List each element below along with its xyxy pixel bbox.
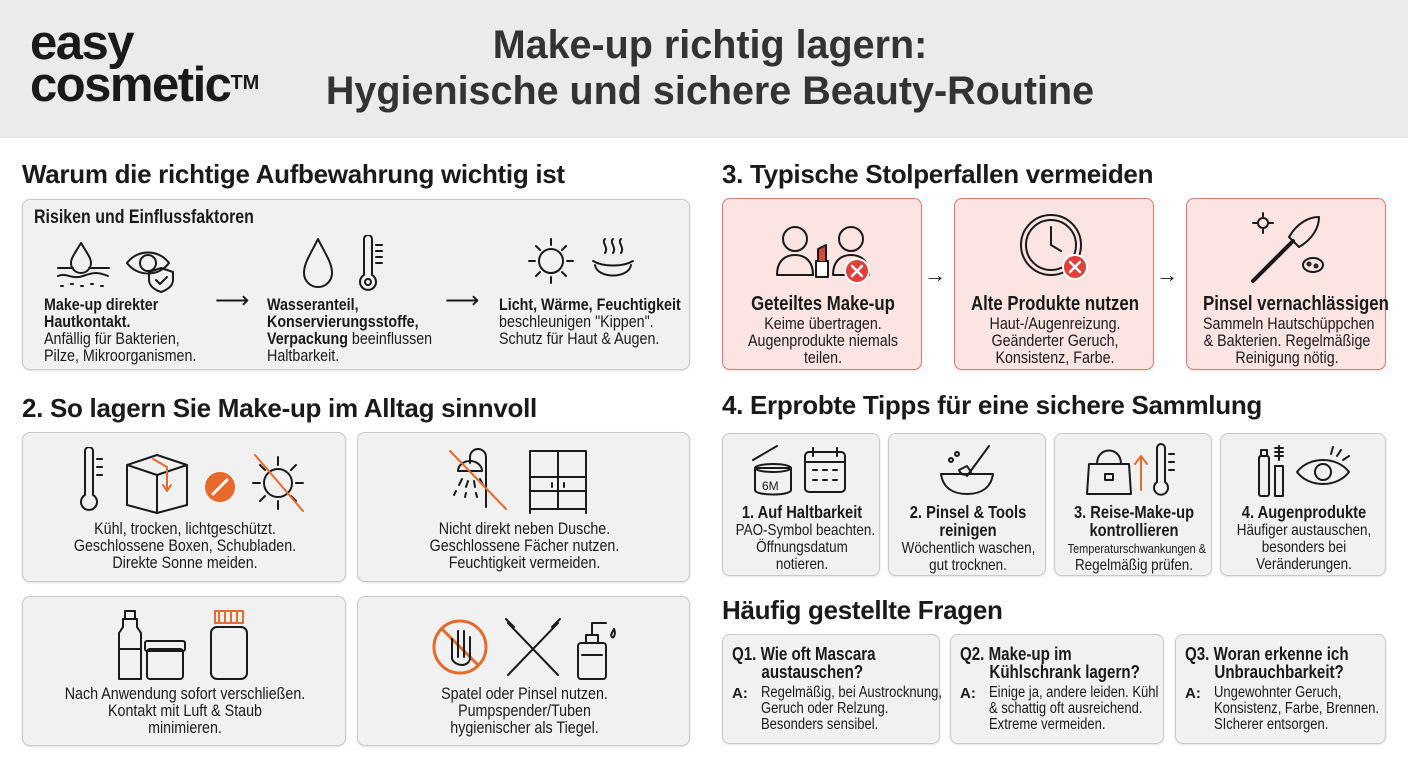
faq 2: Einige ja, andere leiden. Kühl [989,684,1158,701]
text 2: Wasseranteil, [267,295,359,314]
text: 1. Auf Haltbarkeit [742,502,862,522]
faq 3: Unbrauchbarkeit? [1214,662,1344,682]
heading: section 3: 3. Typische Stolperfallen vermeiden [722,159,1153,189]
text 2: Konservierungsstoffe, [267,312,419,331]
text: Geänderter Geruch, [991,331,1118,350]
text 2 [267,295,432,365]
faq 3: A: [1185,685,1201,702]
title [326,23,1094,113]
text: Spatel oder Pinsel nutzen. [441,684,608,703]
text [430,519,619,572]
text: & Bakterien. Regelmäßige [1204,331,1370,350]
faq 2: A: [960,685,976,702]
text: Geteiltes Make-up [751,293,895,315]
text 1: Anfällig für Bakterien, [44,329,180,348]
text: 3. Reise-Make-up [1074,502,1194,522]
icons: shower cabinet [449,448,587,514]
text [748,293,898,367]
icons: drop + thermometer [303,235,383,291]
faq 1: austauschen? [761,662,863,682]
text 1 [44,295,196,365]
tip 1 [722,433,880,576]
text: Regelmäßig prüfen. [1075,557,1193,574]
text: 2. Pinsel & Tools [910,502,1026,522]
logo: cosmeticTM [30,58,259,112]
text 1: Hautkontakt. [44,312,130,331]
text: Veränderungen. [1256,556,1352,573]
faq 3: SIcherer entsorgen. [1214,716,1328,733]
text: Kühl, trocken, lichtgeschützt. [94,519,276,538]
text [441,684,608,737]
text: kontrollieren [1089,520,1179,540]
text 2: Haltbarkeit. [267,346,339,365]
title: Make-up richtig lagern: [493,23,927,67]
text: Haut-/Augenreizung. [990,314,1120,333]
text 3: Schutz für Haut & Augen. [499,329,659,348]
text: PAO-Symbol beachten. [736,522,875,539]
text: reinigen [939,520,997,540]
title: Hygienische und sichere Beauty-Routine [326,69,1094,113]
faq 2: Kühlschrank lagern? [989,662,1140,682]
text 3 [499,295,681,348]
card: cool dry [22,432,346,582]
icons: thermo box sun [80,447,304,514]
text: Keime übertragen. [764,314,882,333]
text [65,684,305,737]
text: notieren. [776,556,828,573]
tip 4 [1220,433,1386,576]
heading: section 2: 2. So lagern Sie Make-up im Alltag sinnvoll [22,393,537,423]
text: Temperaturschwankungen & [1068,541,1206,556]
heading: section 4: 4. Erprobte Tipps für eine sichere Sammlung [722,390,1262,420]
arrow: ⟶ [445,287,479,314]
faq 3: Ungewohnter Geruch, [1214,684,1341,701]
logo: easy [30,16,133,70]
text: besonders bei [1262,539,1346,556]
heading: section 1: Warum die richtige Aufbewahrung wichtig ist [22,159,565,189]
icon: mascara eye [1258,445,1350,497]
icons: no hand, brushes, pump [432,618,616,680]
text: Reinigung nötig. [1235,348,1339,367]
tip 3 [1054,433,1212,576]
icon: clock [1020,214,1088,280]
text: 4. Augenprodukte [1242,502,1366,522]
icon: brush bacteria [1250,212,1324,284]
text: Kontakt mit Luft & Staub [108,701,262,720]
text: gut trocknen. [929,557,1007,574]
text: Öffnungsdatum [756,539,848,556]
text: hygienischer als Tiegel. [450,718,599,737]
faq 1 [722,634,940,744]
arrow: → [924,262,946,287]
text: Geschlossene Boxen, Schubladen. [74,536,296,555]
tip 2 [888,433,1046,576]
text [74,519,296,572]
text [902,502,1035,574]
text 1: Pilze, Mikroorganismen. [44,346,196,365]
text: Sammeln Hautschüppchen [1203,314,1374,333]
icon: jar calendar [752,445,846,496]
faq 1: A: [732,685,748,702]
faq 1: Regelmäßig, bei Austrocknung, [761,684,942,701]
text: Nach Anwendung sofort verschließen. [65,684,305,703]
heading: FAQ: Häufig gestellte Fragen [722,595,1003,625]
faq 3: Q3. Woran erkenne ich [1185,644,1349,664]
faq 3: Konsistenz, Farbe, Brennen. [1214,700,1379,717]
card: shower [357,432,690,582]
text [1068,502,1206,574]
text: Wöchentlich waschen, [902,540,1035,557]
faq 2 [950,634,1164,744]
card: close [22,596,346,746]
text: minimieren. [148,718,222,737]
icon: bag arrow thermo [1086,443,1175,496]
text: Geschlossene Fächer nutzen. [430,536,619,555]
text [971,293,1139,367]
faq 2: & schattig oft ausreichend. [989,700,1142,717]
icon: bowl brush [940,445,994,495]
text: Pumpspender/Tuben [458,701,591,720]
text 2: Verpackung beeinflussen [267,329,432,348]
text [736,502,875,573]
card: spatula [357,596,690,746]
text: Häufiger austauschen, [1237,522,1371,539]
icons: sun + steam [528,238,634,284]
text 3: Licht, Wärme, Feuchtigkeit [499,295,681,314]
text: teilen. [804,348,842,367]
text: Feuchtigkeit vermeiden. [449,553,600,572]
text: Konsistenz, Farbe. [995,348,1115,367]
icons: bottles [118,610,248,680]
icon: people lipstick [776,226,870,284]
faq 3 [1175,634,1386,744]
faq 2: Extreme vermeiden. [989,716,1106,733]
text [1203,293,1389,367]
text: Nicht direkt neben Dusche. [439,519,610,538]
text 1: Make-up direkter [44,295,158,314]
faq 1: Q1. Wie oft Mascara [732,644,876,664]
arrow: → [1156,262,1178,287]
faq 1: Geruch oder Relzung. [761,700,888,717]
card: brushes [1186,198,1386,370]
logo [30,16,259,112]
card: old products [954,198,1154,370]
faq 1: Besonders sensibel. [761,716,878,733]
text: Direkte Sonne meiden. [112,553,258,572]
text: Augenprodukte niemals [748,331,898,350]
header band [0,0,1408,138]
icons: skin + eye [57,242,174,293]
subheading: Risiken und Einflussfaktoren [34,207,254,228]
faq 2: Q2. Make-up im [960,644,1072,664]
panel: risks [22,199,690,370]
text 3: beschleunigen "Kippen". [499,312,654,331]
arrow: ⟶ [215,287,249,314]
card: shared makeup [722,198,922,370]
text: Pinsel vernachlässigen [1203,293,1389,315]
text: Alte Produkte nutzen [971,293,1139,315]
icon: jar calendar: 6M [762,479,779,493]
text [1237,502,1371,573]
